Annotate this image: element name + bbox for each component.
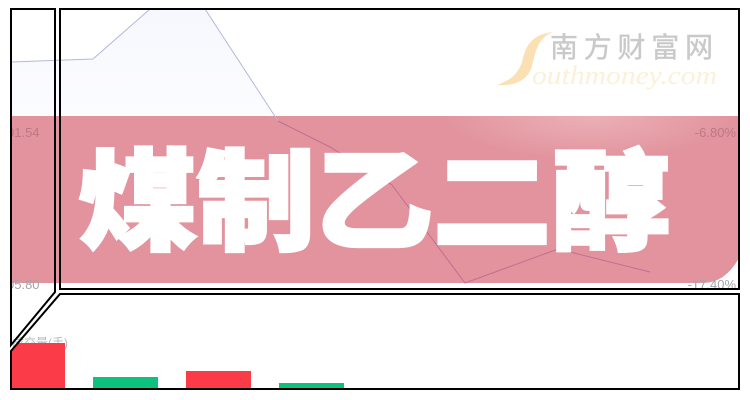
pink title band <box>11 116 739 283</box>
axis label: bottom right: -17.40% <box>688 277 736 292</box>
bar 2 green <box>93 377 158 389</box>
logo swoosh S <box>497 32 553 85</box>
line chart lower trend overlay <box>278 121 650 283</box>
bar 4 green <box>279 383 344 389</box>
logo domain: outhmoney.com <box>532 61 717 90</box>
axis label: bottom left: 05.80 <box>7 277 40 292</box>
bar 1 red <box>11 343 65 389</box>
axis label: top right: -6.80% <box>695 125 736 140</box>
frame: left column <box>11 9 55 345</box>
volume label: 成交量(手) <box>12 335 68 350</box>
axis label: top left: 01.54 <box>7 125 40 140</box>
watermark: southmoney logo <box>497 26 717 90</box>
title: 煤制乙二醇 <box>79 114 670 273</box>
frame: main chart panel <box>60 9 739 289</box>
line chart area fill <box>11 9 650 289</box>
left margin mask <box>0 0 10 400</box>
logo Chinese name: 南方财富网 <box>550 26 713 66</box>
line chart trend line <box>11 9 278 121</box>
bar 3 red <box>186 371 251 389</box>
frame: bottom volume panel <box>11 294 739 389</box>
volume bar chart <box>11 343 344 389</box>
band highlight <box>400 116 739 160</box>
